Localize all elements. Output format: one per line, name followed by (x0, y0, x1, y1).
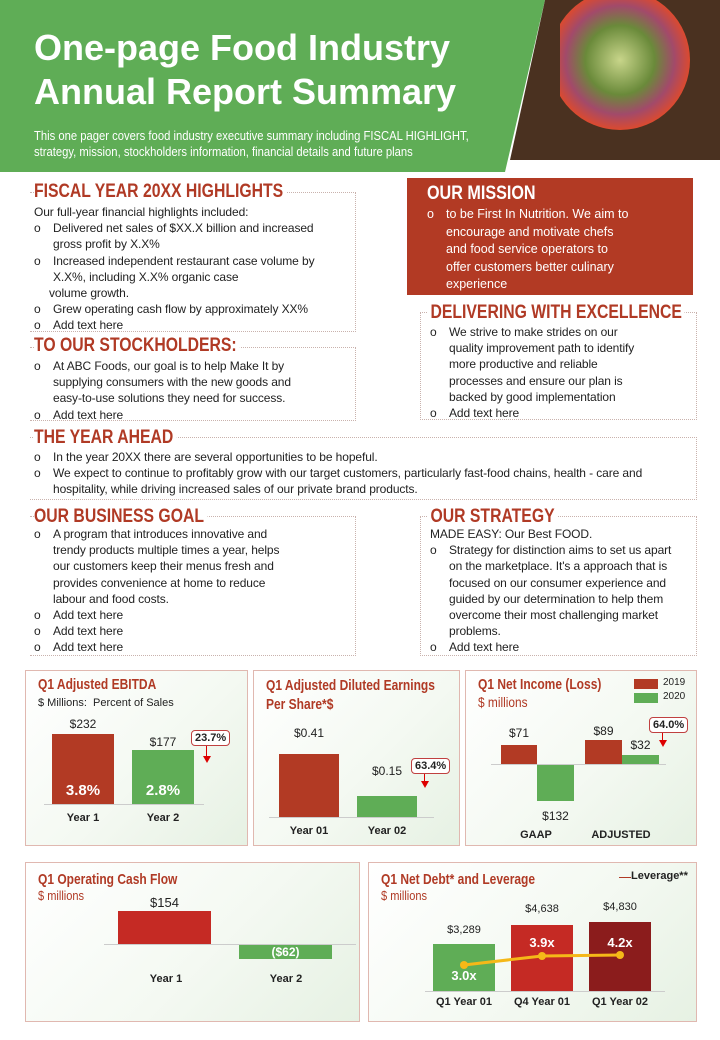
text: strategy (430, 527, 672, 654)
photo: salad bowl (560, 0, 690, 130)
chart: operating cash flow: ($62) (271, 945, 300, 959)
subtitle (34, 129, 469, 159)
text: business goal: A program that introduces innovative and trendy products multiple times a year, helps our customers keep their menus fresh and provides convenience at home to reduce labour and food costs. (53, 527, 279, 606)
text: fiscal: Increased independent restaurant case volume by X.X%, including X.X% organic case (53, 254, 314, 284)
heading: business goal: OUR BUSINESS GOAL (34, 506, 204, 527)
panel: business goal (30, 506, 356, 656)
chart: EBITDA (25, 670, 248, 846)
text: business goal: Add text here (53, 608, 123, 622)
text: stockholders (34, 359, 291, 422)
chart: diluted EPS: Q1 Adjusted Diluted Earnings (266, 677, 435, 694)
chart: operating cash flow (25, 862, 360, 1022)
subtitle: strategy, mission, stockholders information, financial details and future plans (34, 145, 413, 159)
chart: net income: Q1 Net Income (Loss) (478, 676, 601, 693)
chart: net income: ADJUSTED (591, 829, 651, 841)
chart: EBITDA: $177 (150, 735, 176, 749)
text: fiscal: volume growth. (49, 286, 129, 300)
chart: net debt and leverage: 3.9x (529, 935, 555, 950)
chart: net debt and leverage: 3.0x (451, 968, 477, 983)
chart: diluted EPS: Per Share*$ (266, 696, 333, 713)
chart: net debt and leverage: Q1 Year 02 (592, 996, 648, 1008)
text: year ahead: We expect to continue to profitably grow with our target customers, particularly fast-food chains, health - care and hospitality, while driving increased sales of our private brand products. (53, 466, 642, 496)
text: fiscal: Add text here (53, 318, 123, 332)
panel: strategy (420, 506, 697, 656)
text: stockholders: At ABC Foods, our goal is to help Make It by supplying consumers with the new goods and easy-to-use solutions they need for success. (53, 359, 291, 405)
text: strategy: Add text here (449, 640, 519, 654)
chart: net income: 64.0% (653, 719, 684, 731)
chart: operating cash flow: $ millions (38, 888, 84, 903)
text: strategy: MADE EASY: Our Best FOOD. (430, 527, 592, 541)
chart: operating cash flow: Year 2 (270, 973, 302, 985)
chart: net income: 2020 (663, 691, 685, 702)
chart: net debt and leverage: Leverage** (631, 870, 688, 882)
text: business goal: Add text here (53, 640, 123, 654)
chart: diluted EPS: Year 02 (368, 825, 406, 837)
chart: diluted EPS: $0.15 (372, 764, 402, 778)
chart: diluted EPS (253, 670, 460, 846)
heading: delivering: DELIVERING WITH EXCELLENCE (430, 302, 682, 323)
chart: EBITDA: Q1 Adjusted EBITDA (38, 676, 156, 693)
chart: diluted EPS: $0.41 (294, 726, 324, 740)
chart: net debt and leverage: Q1 Net Debt* and Leverage (381, 871, 535, 888)
title: Annual Report Summary (34, 71, 456, 112)
subtitle: This one pager covers food industry executive summary including FISCAL HIGHLIGHT, (34, 129, 469, 143)
chart: net income (465, 670, 697, 846)
chart: operating cash flow: Q1 Operating Cash Flow (38, 871, 177, 888)
chart: EBITDA: Year 1 (67, 812, 99, 824)
chart: diluted EPS: 63.4% (415, 760, 446, 772)
text: fiscal: Delivered net sales of $XX.X billion and increased gross profit by X.X% (53, 221, 314, 251)
chart: net debt and leverage (368, 862, 697, 1022)
title (34, 27, 456, 112)
chart: operating cash flow: Year 1 (150, 973, 182, 985)
chart: EBITDA: 23.7% (195, 732, 226, 744)
text: delivering: We strive to make strides on our quality improvement path to identify more productive and reliable processes and ensure our plan is backed by good implementation (449, 325, 634, 404)
chart: EBITDA: $ Millions: Percent of Sales (38, 697, 174, 709)
text: year ahead: In the year 20XX there are several opportunities to be hopeful. (53, 450, 378, 464)
panel: mission (407, 178, 693, 295)
heading: year ahead: THE YEAR AHEAD (34, 427, 173, 448)
heading: stockholders: TO OUR STOCKHOLDERS: (34, 335, 237, 356)
chart: diluted EPS: Year 01 (290, 825, 328, 837)
heading: strategy: OUR STRATEGY (430, 506, 555, 527)
text: business goal: Add text here (53, 624, 123, 638)
panel: year ahead (30, 427, 697, 500)
panel: delivering (420, 302, 697, 420)
heading: fiscal: FISCAL YEAR 20XX HIGHLIGHTS (34, 181, 283, 202)
text: fiscal (34, 205, 315, 332)
text: fiscal: Our full-year financial highlights included: (34, 205, 248, 219)
chart: net income: GAAP (520, 829, 552, 841)
panel: fiscal highlights (30, 181, 356, 332)
chart: EBITDA: 2.8% (146, 782, 180, 799)
chart: net debt and leverage: $ millions (381, 888, 427, 903)
chart: net income: 2019 (663, 677, 685, 688)
chart: EBITDA: $232 (70, 717, 96, 731)
chart: net income: $132 (542, 809, 569, 823)
chart: net income: $71 (509, 726, 529, 740)
text: year ahead (34, 450, 642, 496)
title: One-page Food Industry (34, 27, 450, 68)
chart: EBITDA: Year 2 (147, 812, 179, 824)
text: strategy: Strategy for distinction aims to set us apart on the marketplace. It's a approach that is focused on our consumer experience and guided by our determination to help them overcome their most challenging market problems. (449, 543, 671, 638)
chart: net debt and leverage: Q1 Year 01 (436, 996, 492, 1008)
heading: mission: OUR MISSION (427, 183, 536, 204)
chart: operating cash flow: $154 (150, 895, 179, 910)
chart: net income: $ millions (478, 694, 528, 710)
chart: net debt and leverage: $3,289 (447, 924, 481, 936)
chart: net debt and leverage: Q4 Year 01 (514, 996, 570, 1008)
chart: EBITDA: 3.8% (66, 782, 100, 799)
chart: net debt and leverage: $4,638 (525, 903, 559, 915)
chart: net debt and leverage: $4,830 (603, 901, 637, 913)
panel: stockholders (30, 335, 356, 422)
text: delivering: Add text here (449, 406, 519, 420)
chart: net income: $89 (593, 724, 614, 738)
text: stockholders: Add text here (53, 408, 123, 422)
text: fiscal: Grew operating cash flow by approximately XX% (53, 302, 308, 316)
text: mission: to be First In Nutrition. We aim to encourage and motivate chefs and food service operators to offer customers better culinary experience (446, 207, 628, 291)
chart: net income: $32 (630, 738, 651, 752)
text: business goal (34, 527, 280, 654)
chart: net debt and leverage: 4.2x (607, 935, 633, 950)
header band (0, 0, 720, 172)
